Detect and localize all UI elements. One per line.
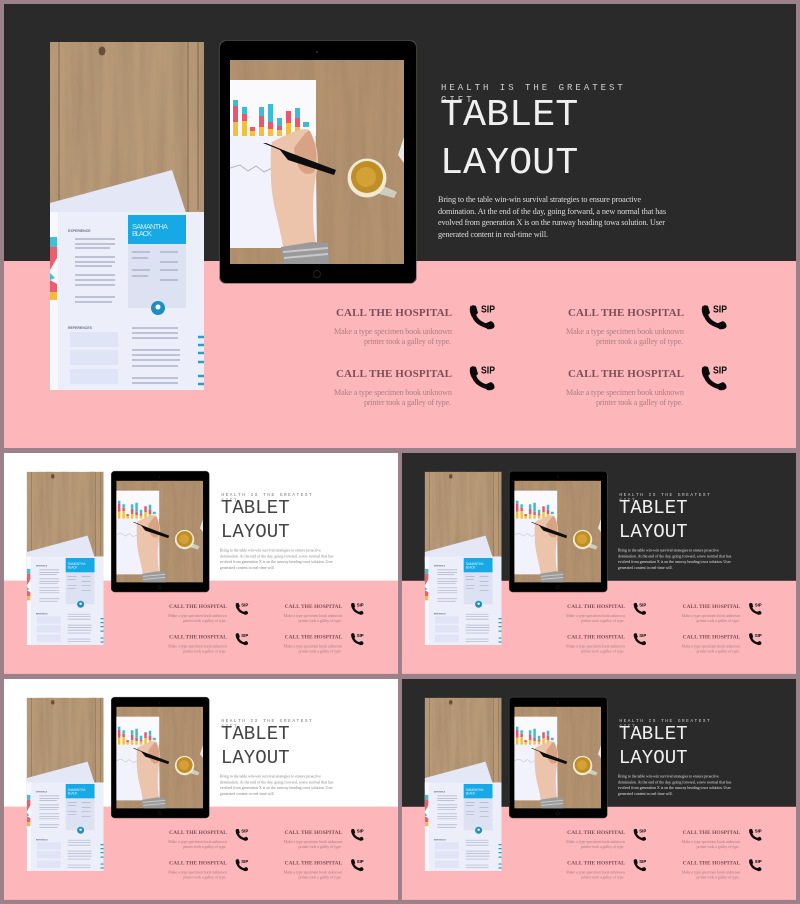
panel: dark thumbnail bottom right: domination. At the end of the day, going forward, a new normal that has — [618, 779, 732, 785]
panel: dark thumbnail bottom right: TABLET — [619, 723, 688, 745]
panel: light thumbnail bottom left: TABLET — [221, 723, 290, 745]
feature: call the hospital 2: CALL THE HOSPITAL — [568, 307, 684, 319]
panel: light thumbnail top left: printer took a galley of type. — [299, 648, 342, 653]
panel: dark thumbnail top right: Make a type specimen book unknown — [682, 613, 740, 618]
feature: call the hospital 2 — [566, 307, 684, 346]
panel: light thumbnail top left: Make a type specimen book unknown — [284, 644, 342, 649]
feature: call the hospital 1: printer took a galley of type. — [364, 337, 451, 346]
panel: light thumbnail bottom left: Make a type specimen book unknown — [168, 839, 227, 844]
panel: light thumbnail bottom left: SIP — [241, 828, 249, 834]
body text: Bring to the table win-win survival strategies to ensure proactive — [438, 195, 641, 204]
panel: dark thumbnail top right: LAYOUT — [619, 521, 688, 543]
panel: light thumbnail bottom left: SIP — [241, 859, 249, 865]
panel: light thumbnail bottom left: Bring to the table win-win survival strategies to ensure proactive — [220, 773, 321, 778]
panel: dark thumbnail top right: CALL THE HOSPITAL — [683, 635, 741, 641]
panel: dark thumbnail bottom right: CALL THE HOSPITAL — [567, 830, 625, 836]
panel: dark thumbnail bottom right: CALL THE HOSPITAL — [683, 830, 741, 836]
icon: phone SIP 2 — [702, 304, 727, 329]
feature: call the hospital 3 — [334, 368, 452, 407]
panel: light thumbnail top left: printer took a galley of type. — [183, 618, 226, 623]
panel: light thumbnail bottom left: generated content in real-time will. — [220, 791, 275, 796]
feature: call the hospital 1 — [334, 307, 452, 346]
panel: light thumbnail bottom left: evolved from generation X is on the runway heading towa solution. User — [220, 785, 333, 790]
panel: dark thumbnail bottom right: SIP — [639, 859, 647, 865]
panel: light thumbnail bottom left — [4, 679, 398, 900]
panel: dark thumbnail top right — [402, 453, 796, 674]
icon: phone SIP 4 — [702, 366, 727, 390]
panel: light thumbnail top left: SIP — [357, 633, 364, 639]
feature: call the hospital 3: CALL THE HOSPITAL — [336, 368, 452, 380]
icon: phone SIP 4: SIP — [713, 366, 727, 376]
panel: dark thumbnail top right: CALL THE HOSPITAL — [567, 635, 625, 641]
panel: dark thumbnail bottom right: printer took a galley of type. — [581, 874, 624, 879]
body text — [438, 195, 666, 239]
panel: dark thumbnail bottom right: Make a type specimen book unknown — [682, 870, 740, 875]
panel: dark thumbnail top right: printer took a galley of type. — [697, 618, 740, 623]
panel: dark thumbnail top right: Make a type specimen book unknown — [566, 613, 625, 618]
panel: dark thumbnail bottom right: LAYOUT — [619, 747, 688, 769]
pink lower band — [4, 261, 796, 448]
panel: light thumbnail bottom left: GIFT — [221, 724, 238, 730]
panel: light thumbnail top left: LAYOUT — [221, 521, 290, 543]
image: wood desk and resume photo — [50, 42, 204, 390]
kicker: HEALTH IS THE GREATEST — [441, 83, 626, 93]
panel: dark thumbnail bottom right: Make a type specimen book unknown — [566, 870, 625, 875]
body text: generated content in real-time will. — [438, 230, 548, 239]
panel: light thumbnail bottom left: CALL THE HOSPITAL — [285, 830, 343, 836]
panel: light thumbnail top left: HEALTH IS THE GREATEST — [221, 492, 313, 498]
title — [440, 93, 578, 185]
icon: phone SIP 2: SIP — [713, 304, 727, 316]
panel: light thumbnail top left: CALL THE HOSPITAL — [285, 635, 343, 641]
panel: dark thumbnail bottom right: SIP — [755, 859, 762, 865]
panel: light thumbnail top left — [4, 453, 398, 674]
panel: light thumbnail bottom left: Make a type specimen book unknown — [284, 870, 342, 875]
panel: dark thumbnail top right: printer took a galley of type. — [581, 618, 624, 623]
panel: dark thumbnail top right: SIP — [639, 602, 647, 608]
panel: dark thumbnail bottom right: Bring to the table win-win survival strategies to ensure proactive — [618, 773, 719, 778]
panel: dark thumbnail top right: CALL THE HOSPITAL — [567, 604, 625, 610]
panel: dark thumbnail bottom right: SIP — [755, 828, 762, 834]
feature: call the hospital 4: Make a type specimen book unknown — [566, 388, 684, 397]
panel: dark thumbnail bottom right: generated content in real-time will. — [618, 791, 673, 796]
image: tablet showing chart on desk — [220, 40, 416, 284]
dark upper band — [4, 4, 796, 261]
panel: dark thumbnail top right: GIFT — [619, 498, 636, 504]
panel: light thumbnail bottom left: LAYOUT — [221, 747, 290, 769]
panel: light thumbnail bottom left: domination. At the end of the day, going forward, a new normal that has — [220, 779, 334, 785]
feature: call the hospital 4: CALL THE HOSPITAL — [568, 368, 684, 380]
panel: dark thumbnail top right: SIP — [755, 633, 762, 639]
panel: light thumbnail bottom left: CALL THE HOSPITAL — [285, 861, 343, 867]
panel: light thumbnail top left: CALL THE HOSPITAL — [169, 604, 227, 610]
panel: light thumbnail top left: Make a type specimen book unknown — [168, 644, 227, 649]
panel: dark thumbnail bottom right: printer took a galley of type. — [697, 874, 740, 879]
panel: dark thumbnail top right: CALL THE HOSPITAL — [683, 604, 741, 610]
panel: dark thumbnail bottom right: printer took a galley of type. — [697, 844, 740, 849]
kicker — [441, 83, 626, 105]
icon: phone SIP 1 — [470, 304, 495, 329]
panel: dark thumbnail top right: SIP — [755, 602, 762, 608]
panel: dark thumbnail top right: domination. At the end of the day, going forward, a new normal that has — [618, 553, 732, 559]
panel: dark thumbnail top right: printer took a galley of type. — [697, 648, 740, 653]
panel: light thumbnail bottom left: SIP — [357, 859, 364, 865]
panel: dark thumbnail top right: evolved from generation X is on the runway heading towa solution. User — [618, 559, 731, 564]
panel: dark thumbnail top right: Make a type specimen book unknown — [566, 644, 625, 649]
icon: phone SIP 1: SIP — [481, 304, 495, 316]
panel: light thumbnail top left: printer took a galley of type. — [183, 648, 226, 653]
panel: dark thumbnail bottom right: Make a type specimen book unknown — [566, 839, 625, 844]
panel: light thumbnail top left: Make a type specimen book unknown — [284, 613, 342, 618]
feature: call the hospital 2: Make a type specimen book unknown — [566, 327, 684, 336]
panel: light thumbnail bottom left: Make a type specimen book unknown — [168, 870, 227, 875]
panel: light thumbnail top left: printer took a galley of type. — [299, 618, 342, 623]
panel: light thumbnail top left: evolved from generation X is on the runway heading towa solution. User — [220, 559, 333, 564]
panel: dark thumbnail top right: Bring to the table win-win survival strategies to ensure proactive — [618, 547, 719, 552]
panel: dark thumbnail bottom right: Make a type specimen book unknown — [682, 839, 740, 844]
feature: call the hospital 2: printer took a galley of type. — [596, 337, 683, 346]
panel: light thumbnail top left: generated content in real-time will. — [220, 565, 275, 570]
panel: light thumbnail top left: GIFT — [221, 498, 238, 504]
panel: dark thumbnail top right: generated content in real-time will. — [618, 565, 673, 570]
panel: light thumbnail bottom left: printer took a galley of type. — [183, 874, 226, 879]
panel: light thumbnail top left: CALL THE HOSPITAL — [169, 635, 227, 641]
title: TABLET — [440, 93, 578, 137]
panel: light thumbnail bottom left: printer took a galley of type. — [183, 844, 226, 849]
kicker: GIFT — [441, 95, 475, 105]
title: LAYOUT — [440, 141, 578, 185]
panel: dark thumbnail top right: TABLET — [619, 497, 688, 519]
feature: call the hospital 4: printer took a galley of type. — [596, 398, 683, 407]
panel: light thumbnail bottom left: SIP — [357, 828, 364, 834]
panel: light thumbnail bottom left: CALL THE HOSPITAL — [169, 830, 227, 836]
panel: dark thumbnail bottom right: SIP — [639, 828, 647, 834]
panel: light thumbnail top left: SIP — [241, 633, 249, 639]
feature: call the hospital 1: Make a type specimen book unknown — [334, 327, 452, 336]
panel: dark thumbnail bottom right: CALL THE HOSPITAL — [683, 861, 741, 867]
panel: dark thumbnail bottom right: GIFT — [619, 724, 636, 730]
panel: light thumbnail bottom left: CALL THE HOSPITAL — [169, 861, 227, 867]
panel: dark thumbnail bottom right: printer took a galley of type. — [581, 844, 624, 849]
panel: dark thumbnail bottom right: HEALTH IS THE GREATEST — [619, 718, 711, 724]
icon: phone SIP 3 — [470, 366, 495, 390]
panel: dark thumbnail top right: Make a type specimen book unknown — [682, 644, 740, 649]
panel: light thumbnail top left: SIP — [241, 602, 249, 608]
body text: domination. At the end of the day, going forward, a new normal that has — [438, 207, 666, 216]
feature: call the hospital 4 — [566, 368, 684, 407]
panel: light thumbnail bottom left: printer took a galley of type. — [299, 844, 342, 849]
panel: light thumbnail top left: TABLET — [221, 497, 290, 519]
panel: dark thumbnail bottom right: evolved from generation X is on the runway heading towa solution. User — [618, 785, 731, 790]
panel: dark thumbnail top right: HEALTH IS THE GREATEST — [619, 492, 711, 498]
panel: dark thumbnail top right: printer took a galley of type. — [581, 648, 624, 653]
panel: light thumbnail top left: CALL THE HOSPITAL — [285, 604, 343, 610]
panel: light thumbnail top left: Make a type specimen book unknown — [168, 613, 227, 618]
panel: dark thumbnail top right: SIP — [639, 633, 647, 639]
panel: light thumbnail top left: SIP — [357, 602, 364, 608]
feature: call the hospital 1: CALL THE HOSPITAL — [336, 307, 452, 319]
panel: light thumbnail bottom left: HEALTH IS THE GREATEST — [221, 718, 313, 724]
panel: light thumbnail top left: Bring to the table win-win survival strategies to ensure proactive — [220, 547, 321, 552]
feature: call the hospital 3: printer took a galley of type. — [364, 398, 451, 407]
panel: light thumbnail top left: domination. At the end of the day, going forward, a new normal that has — [220, 553, 334, 559]
panel: light thumbnail bottom left: Make a type specimen book unknown — [284, 839, 342, 844]
panel: light thumbnail bottom left: printer took a galley of type. — [299, 874, 342, 879]
feature: call the hospital 3: Make a type specimen book unknown — [334, 388, 452, 397]
icon: phone SIP 3: SIP — [481, 366, 495, 376]
body text: evolved from generation X is on the runway heading towa solution. User — [438, 218, 665, 227]
panel: dark thumbnail bottom right — [402, 679, 796, 900]
panel: dark thumbnail bottom right: CALL THE HOSPITAL — [567, 861, 625, 867]
panel: main dark slide — [4, 4, 796, 448]
